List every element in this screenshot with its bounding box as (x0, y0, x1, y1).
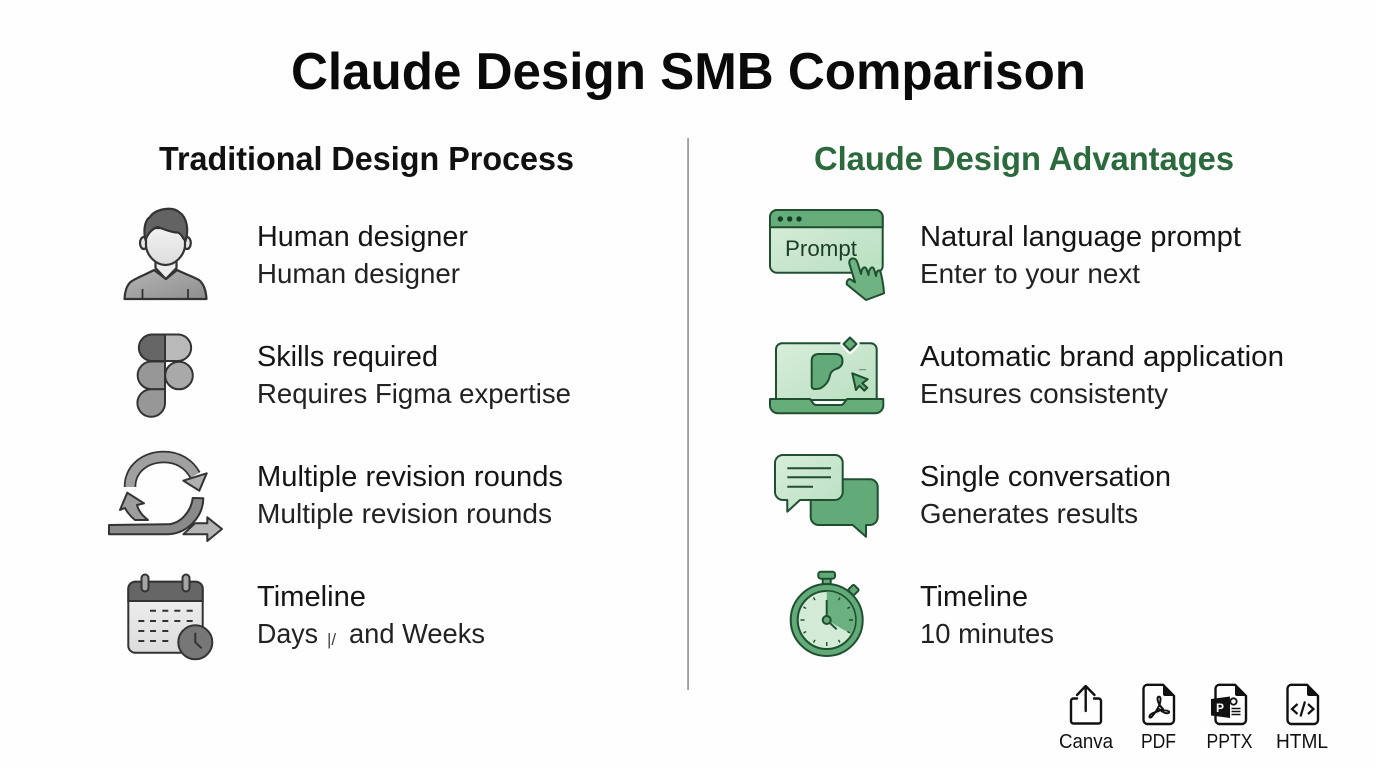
text: timeline days and weeks: Timeline (257, 581, 366, 613)
text: timeline days and weeks: Days (257, 618, 318, 649)
text: timeline 10 minutes: Timeline (920, 581, 1028, 613)
text: skills required: Skills required (257, 341, 438, 373)
title: Claude Design SMB Comparison (291, 43, 1086, 101)
text: automatic brand application: Automatic brand application (920, 341, 1284, 373)
export formats (1059, 685, 1328, 753)
icon: revision loop arrows (109, 457, 222, 541)
text: multiple revision rounds: Multiple revision rounds (257, 461, 563, 493)
icon: human designer (124, 209, 206, 299)
export: pdf (1141, 685, 1176, 753)
center divider (687, 138, 689, 690)
text: natural language prompt: Enter to your next (920, 258, 1140, 289)
icon: figma logo (137, 334, 193, 417)
export: pptx: P (1216, 701, 1224, 715)
text: single conversation: Generates results (920, 498, 1138, 529)
export: canva: Canva (1059, 731, 1114, 753)
export: html (1276, 685, 1328, 753)
text: natural language prompt: Natural language prompt (920, 221, 1241, 253)
export: html: HTML (1276, 731, 1328, 753)
text: timeline days and weeks: and Weeks (349, 618, 485, 649)
export: pptx: PPTX (1206, 731, 1252, 753)
export: pptx (1206, 685, 1252, 753)
text: multiple revision rounds (257, 461, 563, 529)
panel: claude design advantages (770, 140, 1284, 656)
heading: claude design advantages: Claude Design Advantages (814, 140, 1234, 177)
panel: traditional design process (109, 140, 574, 659)
text: human designer (257, 221, 469, 289)
heading: traditional design process: Traditional Design Process (159, 140, 574, 177)
text: timeline days and weeks: |/ (327, 630, 336, 649)
text: single conversation (920, 461, 1171, 529)
icon: prompt window with hand (770, 210, 884, 300)
export: canva (1059, 686, 1114, 753)
icon: chat bubbles (775, 455, 878, 537)
text: timeline days and weeks (257, 581, 485, 649)
icon: stopwatch (791, 572, 863, 656)
text: single conversation: Single conversation (920, 461, 1171, 493)
icon: laptop with brand mark (770, 337, 883, 413)
icon: prompt window with hand: Prompt (785, 236, 857, 261)
text: timeline 10 minutes (920, 581, 1054, 649)
text: automatic brand application: Ensures consistenty (920, 378, 1168, 409)
text: natural language prompt (920, 221, 1241, 289)
text: human designer: Human designer (257, 221, 469, 253)
text: timeline 10 minutes: 10 minutes (920, 618, 1054, 649)
text: skills required: Requires Figma expertise (257, 378, 571, 409)
icon: calendar with clock (128, 574, 212, 659)
text: human designer: Human designer (257, 258, 460, 289)
export: pdf: PDF (1141, 731, 1176, 753)
text: multiple revision rounds: Multiple revision rounds (257, 498, 552, 529)
text: skills required (257, 341, 571, 409)
text: automatic brand application (920, 341, 1284, 409)
